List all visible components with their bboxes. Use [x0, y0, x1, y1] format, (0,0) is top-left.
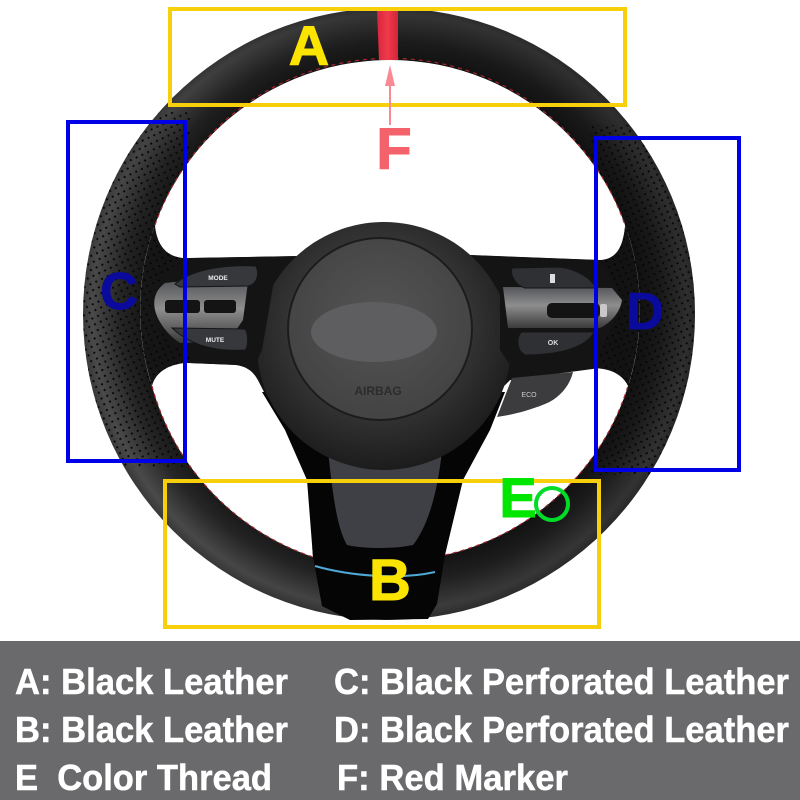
right control panel	[500, 262, 625, 372]
label B: B	[369, 548, 411, 613]
legend E: E Color Thread	[15, 757, 272, 798]
airbag text: AIRBAG	[354, 384, 402, 398]
label D: D	[626, 283, 664, 341]
label A: A	[289, 14, 329, 77]
box B	[165, 481, 599, 627]
white hole mask: lower left	[152, 363, 313, 557]
hub	[257, 222, 511, 470]
airbag pad	[288, 238, 472, 420]
legend A: A: Black Leather	[15, 661, 288, 702]
legend panel	[0, 641, 800, 800]
right control panel: OK	[548, 340, 558, 347]
white hole mask: lower right	[445, 368, 628, 555]
perforated leather: right grip	[590, 125, 695, 475]
airbag oval emblem	[311, 302, 437, 362]
ECO paddle	[497, 372, 573, 417]
left control panel: MUTE	[206, 337, 225, 344]
blue trim line	[315, 566, 435, 576]
ECO paddle: ECO	[521, 392, 537, 399]
arrow to marker	[385, 65, 395, 125]
legend C: C: Black Perforated Leather	[334, 661, 789, 702]
left control panel: MODE	[208, 275, 228, 282]
left spoke	[140, 225, 300, 400]
perforated leather: left grip	[83, 112, 190, 467]
box C	[68, 122, 185, 461]
label E: E	[499, 466, 537, 529]
legend B: B: Black Leather	[15, 709, 288, 750]
thread circle	[536, 488, 568, 520]
inner spoke bridges	[190, 255, 600, 420]
legend F: F: Red Marker	[337, 757, 568, 798]
left control panel	[150, 259, 275, 365]
box D	[596, 138, 739, 470]
wheel rim	[83, 8, 695, 620]
bottom spoke grey panel	[328, 450, 442, 548]
box A	[170, 9, 625, 105]
red marker	[377, 10, 398, 60]
steering wheel photo	[83, 8, 695, 620]
bottom spoke	[262, 392, 505, 620]
stitching along inner rim	[152, 58, 628, 557]
right spoke	[470, 225, 640, 420]
label F: F	[376, 117, 412, 182]
legend D: D: Black Perforated Leather	[334, 709, 789, 750]
label C: C	[100, 263, 138, 321]
white hole mask: upper	[155, 60, 625, 260]
